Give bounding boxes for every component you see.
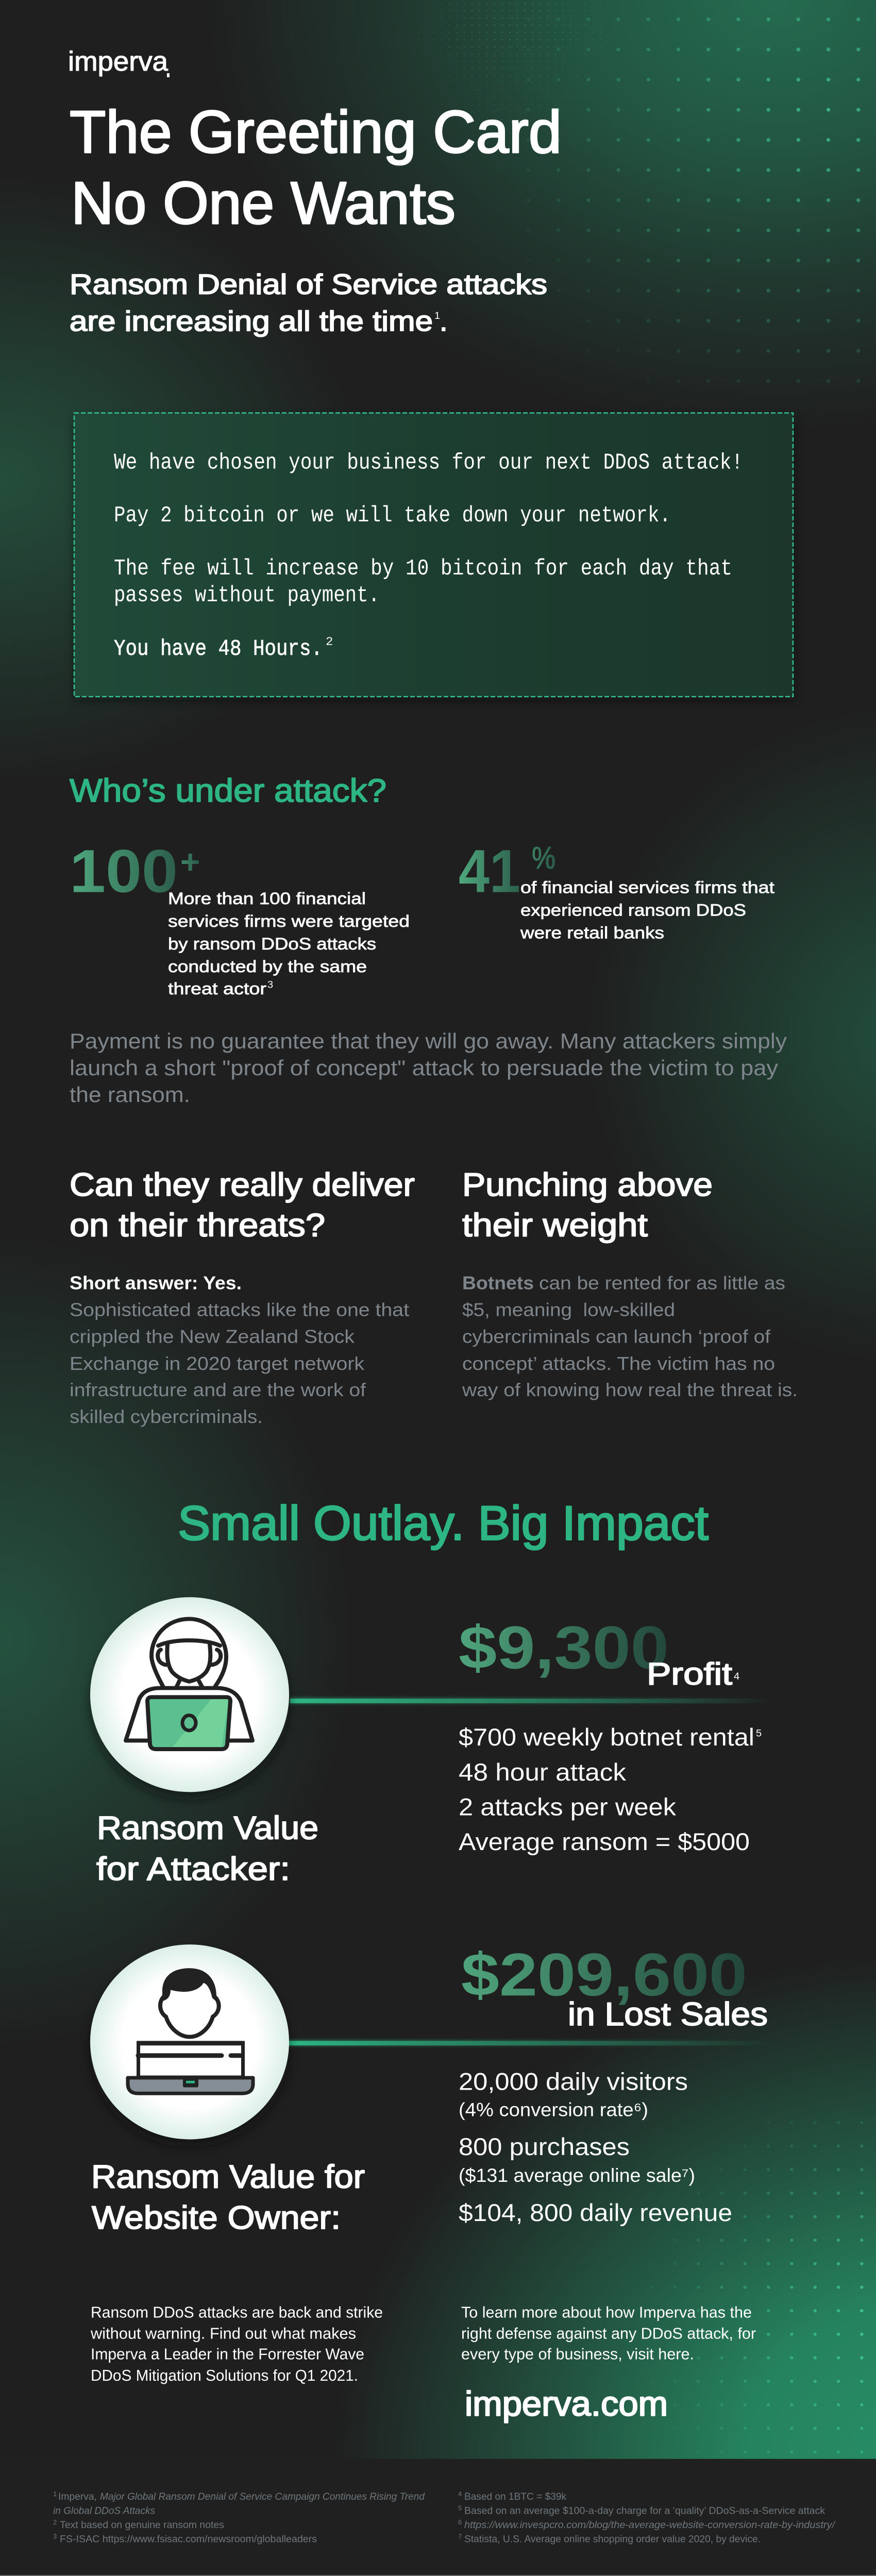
footnotes: right column: Statista, U.S. Average online shopping order value 2020, by device.: [464, 2534, 761, 2545]
body text: Exchange in 2020 target network: [70, 1353, 365, 1374]
footnotes: left column: 3: [53, 2533, 57, 2540]
body text: can be rented for as little as: [539, 1273, 785, 1293]
stat text: [520, 878, 774, 942]
footnotes: left column: Major Global Ransom Denial of Service Campaign Continues Rising Trend: [100, 2491, 425, 2502]
heading: who's under attack: Who’s under attack?: [70, 773, 386, 809]
label: ransom value for attacker: for Attacker:: [96, 1851, 290, 1887]
panel: can they really deliver: [70, 1167, 415, 1427]
footnotes: right column: Based on an average $100-a-day charge for a ‘quality’ DDoS-as-a-Service attack: [464, 2505, 825, 2516]
panel: punching above their weight: [462, 1167, 798, 1400]
list: attacker costs: Average ransom = $5000: [459, 1828, 750, 1856]
ransom note text: The fee will increase by 10 bitcoin for each day that: [114, 556, 732, 582]
heading: Punching above: [462, 1167, 713, 1203]
label: ransom value for website owner: Ransom Value for: [91, 2159, 365, 2195]
label: ransom value for website owner: [91, 2159, 365, 2236]
ransom note text: 2: [326, 635, 333, 649]
list: website owner losses: 20,000 daily visitors: [459, 2069, 688, 2095]
ransom note text: [114, 451, 743, 662]
stat: $9,300 profit: [459, 1614, 739, 1692]
list: website owner losses: (4% conversion rate⁶): [459, 2099, 648, 2120]
subtitle: are increasing all the time: [70, 305, 433, 337]
body text: Botnets: [462, 1273, 534, 1293]
list: website owner losses: [459, 2069, 732, 2227]
stat: $9,300 profit: $9,300: [459, 1614, 669, 1682]
short answer: Short answer: Yes.: [70, 1273, 242, 1293]
stat text: of financial services firms that: [520, 878, 774, 896]
stat text: conducted by the same: [168, 957, 367, 976]
body text: Sophisticated attacks like the one that: [70, 1299, 409, 1320]
subtitle: 1: [434, 310, 440, 321]
text block: payment is no guarantee: Payment is no guarantee that they will go away. Many attackers simply: [70, 1029, 787, 1054]
list: attacker costs: 2 attacks per week: [459, 1794, 676, 1821]
list: website owner losses: $104, 800 daily revenue: [459, 2200, 732, 2227]
list: attacker costs: [459, 1724, 762, 1856]
dot pattern: bottom right: [652, 2121, 864, 2453]
footnotes: right column: 5: [458, 2504, 462, 2512]
stat text: experienced ransom DDoS: [520, 901, 746, 919]
stat text: services firms were targeted: [168, 911, 410, 930]
heading: Can they really deliver: [70, 1167, 415, 1203]
text block: to learn more: right defense against any DDoS attack, for: [461, 2325, 756, 2342]
connector line: attacker: [290, 1698, 773, 1704]
icon: hooded attacker with laptop: [90, 1597, 289, 1800]
body text: infrastructure and are the work of: [70, 1380, 366, 1400]
body text: concept’ attacks. The victim has no: [462, 1353, 775, 1374]
subtitle: Ransom Denial of Service attacks: [70, 268, 547, 300]
stat text: More than 100 financial: [168, 889, 366, 908]
footnotes: right column: Based on 1BTC = $39k: [464, 2491, 566, 2502]
text block: to learn more: every type of business, visit here.: [461, 2345, 694, 2363]
stat text: by ransom DDoS attacks: [168, 934, 376, 953]
heading: their weight: [462, 1208, 648, 1243]
big number 41%: %: [532, 840, 555, 875]
stat: $9,300 profit: 4: [734, 1671, 739, 1682]
text block: ransom ddos attacks are back: [90, 2303, 383, 2384]
footnotes: left column: [53, 2490, 425, 2545]
text block: ransom ddos attacks are back: without warning. Find out what makes: [90, 2325, 356, 2342]
label: ransom value for attacker: Ransom Value: [97, 1810, 318, 1846]
label: ransom value for attacker: [96, 1810, 318, 1887]
stat: 100+: [70, 837, 410, 998]
body text: $5, meaning low-skilled: [462, 1299, 675, 1320]
logo: imperva: imperva: [68, 47, 168, 77]
footnotes: left column: FS-ISAC https://www.fsisac.com/newsroom/globalleaders: [60, 2534, 317, 2545]
title: No One Wants: [71, 170, 456, 236]
body text: skilled cybercriminals.: [70, 1406, 263, 1427]
stat: $9,300 profit: Profit: [647, 1656, 732, 1692]
list: attacker costs: 48 hour attack: [459, 1759, 626, 1786]
footnotes: left column: Imperva,: [58, 2491, 97, 2502]
footer band: [0, 2459, 876, 2576]
body text: cybercriminals can launch ‘proof of: [462, 1326, 771, 1347]
text block: payment is no guarantee: launch a short "proof of concept" attack to persuade the victim to pay: [70, 1056, 779, 1080]
text block: to learn more: To learn more about how Imperva has the: [461, 2303, 752, 2321]
body text: way of knowing how real the threat is.: [462, 1380, 798, 1400]
list: website owner losses: 800 purchases: [459, 2133, 630, 2161]
big number 100+: +: [180, 843, 200, 880]
title: [70, 98, 562, 236]
icon: website owner with laptop: [90, 1944, 289, 2147]
stat text: threat actor: [168, 979, 266, 998]
heading: [462, 1167, 713, 1243]
connector line: website owner: [289, 2040, 773, 2046]
stat: $209,600 in lost sales: in Lost Sales: [568, 1997, 768, 2032]
heading: small outlay big impact: Small Outlay. Big Impact: [178, 1496, 709, 1550]
text block: ransom ddos attacks are back: DDoS Mitigation Solutions for Q1 2021.: [91, 2366, 358, 2384]
list: website owner losses: ($131 average online sale⁷): [459, 2164, 695, 2186]
footnotes: left column: in Global DDoS Attacks: [53, 2505, 155, 2516]
footnotes: right column: 7: [458, 2533, 462, 2540]
stat: $209,600 in lost sales: [461, 1941, 768, 2032]
footnotes: right column: https://www.invespcro.com/blog/the-average-website-conversion-rate-by-industry/: [464, 2519, 836, 2531]
ransom note text: Pay 2 bitcoin or we will take down your network.: [114, 504, 671, 529]
stat text: 3: [267, 979, 273, 990]
big number 41%: 41: [459, 837, 520, 905]
heading: [70, 1167, 415, 1243]
title: The Greeting Card: [70, 98, 562, 165]
footnotes: left column: Text based on genuine ransom notes: [60, 2519, 224, 2531]
text block: payment is no guarantee: the ransom.: [70, 1082, 190, 1107]
stat text: [168, 889, 410, 998]
list: attacker costs: 5: [756, 1728, 762, 1739]
footnotes: left column: 2: [53, 2518, 57, 2526]
list: attacker costs: $700 weekly botnet rental: [459, 1724, 754, 1751]
footnotes: left column: 1: [53, 2490, 57, 2498]
subtitle: [70, 268, 547, 337]
subtitle: .: [440, 305, 448, 337]
text block: payment is no guarantee: [70, 1029, 787, 1107]
label: ransom value for website owner: Website Owner:: [92, 2200, 341, 2236]
dot pattern: top right: [403, 3, 861, 383]
body text: [70, 1299, 409, 1427]
stat: $209,600 in lost sales: $209,600: [461, 1941, 747, 2009]
heading: on their threats?: [70, 1208, 325, 1243]
text block: to learn more: [461, 2303, 756, 2363]
text block: ransom ddos attacks are back: Imperva a Leader in the Forrester Wave: [91, 2345, 364, 2363]
body text: [462, 1273, 798, 1400]
big number 100+: 100: [70, 837, 178, 905]
footnotes: right column: 4: [458, 2490, 462, 2498]
stat text: were retail banks: [520, 923, 664, 942]
body text: crippled the New Zealand Stock: [70, 1326, 355, 1347]
ransom note text: You have 48 Hours.: [114, 637, 323, 662]
panel: ransom note: [74, 413, 793, 700]
footnotes: right column: [458, 2490, 836, 2545]
link: imperva.com: imperva.com: [465, 2385, 668, 2423]
footnotes: right column: 6: [458, 2518, 462, 2526]
stat: 41%: [459, 837, 774, 942]
ransom note text: passes without payment.: [114, 583, 380, 608]
text block: ransom ddos attacks are back: Ransom DDoS attacks are back and strike: [91, 2303, 383, 2321]
ransom note text: We have chosen your business for our next DDoS attack!: [114, 451, 743, 476]
